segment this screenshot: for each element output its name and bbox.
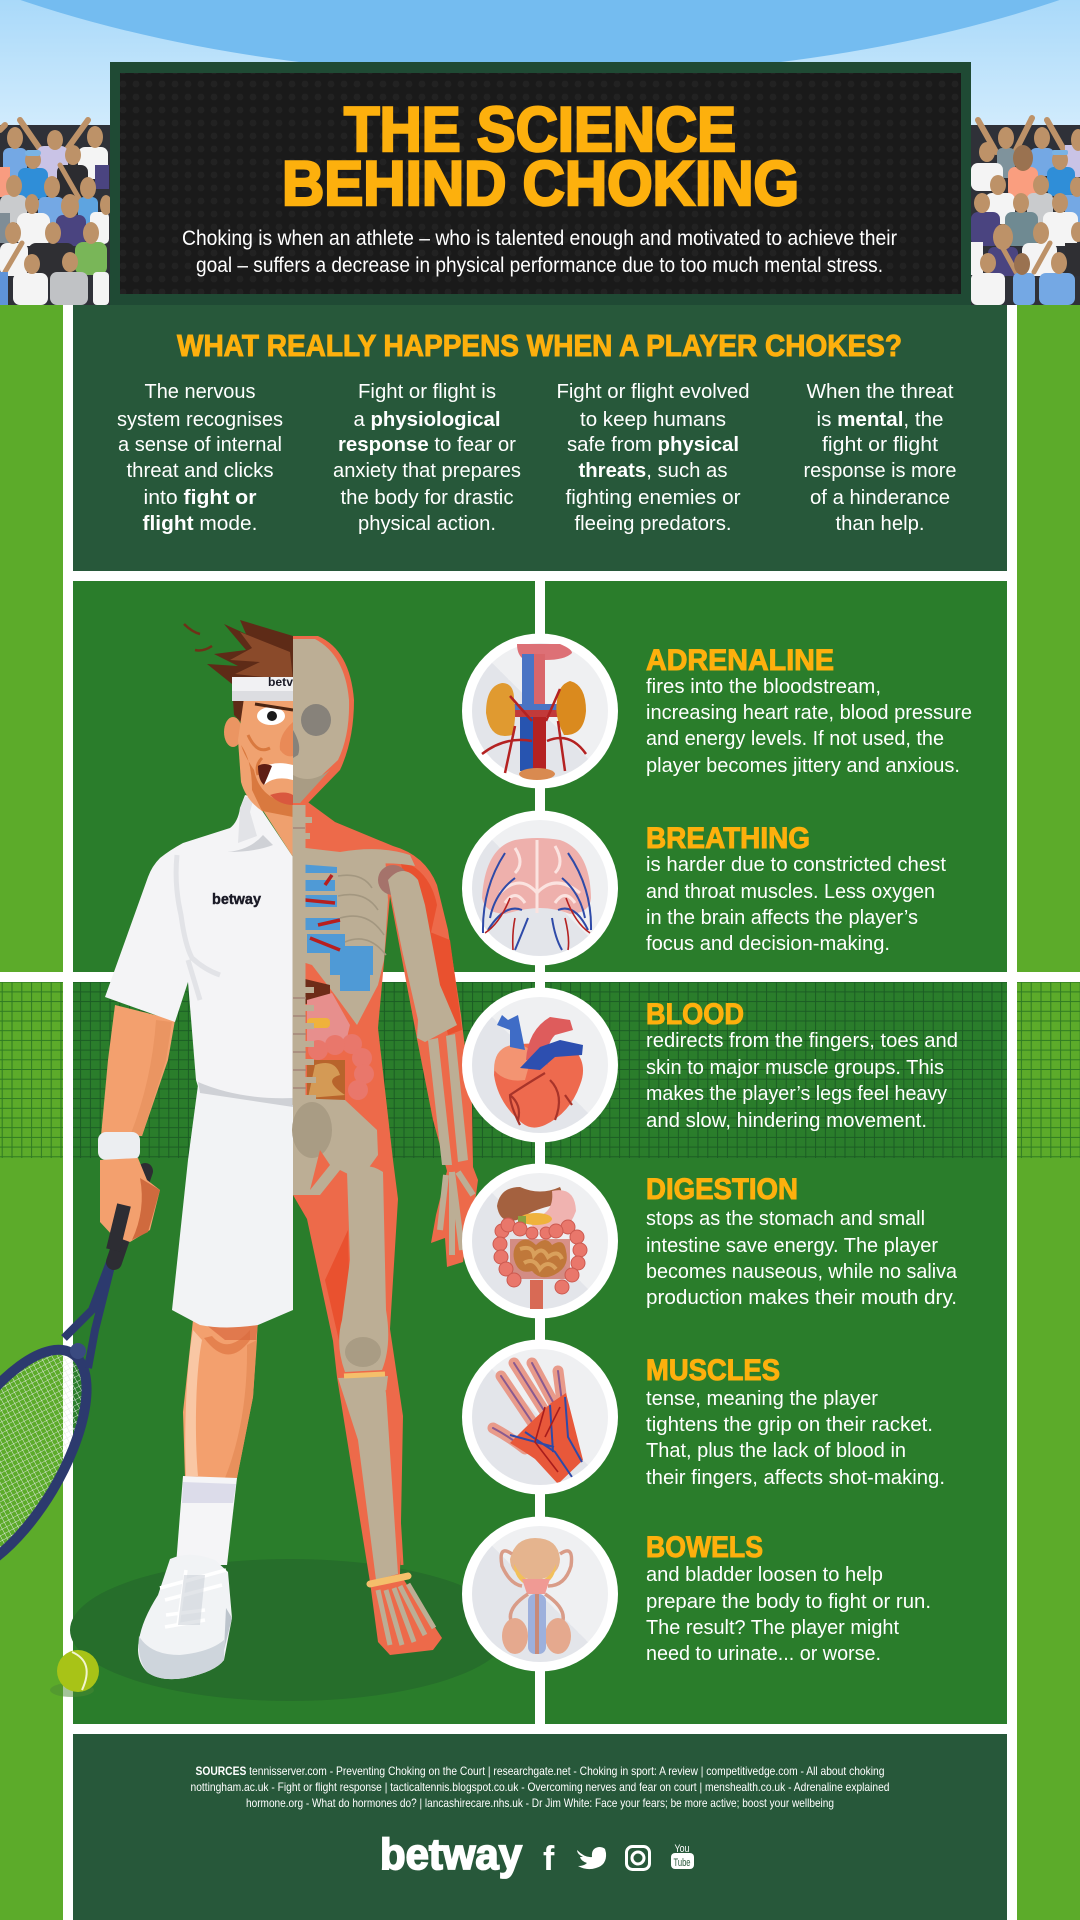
column 2: response to fear or: [338, 434, 516, 456]
crowd right: [971, 118, 1080, 305]
text: muscles: their fingers, affects shot-making.: [646, 1467, 945, 1489]
icon: facebook: f: [543, 1840, 555, 1878]
rib separators: [338, 875, 386, 955]
text: breathing: focus and decision-making.: [646, 933, 890, 955]
panel: footer: [73, 1734, 1007, 1920]
column 1: threat and clicks: [126, 460, 274, 482]
femur: [339, 1166, 388, 1372]
column 4: [804, 381, 956, 535]
column 2: physical action.: [358, 513, 496, 535]
text: breathing: [646, 822, 946, 955]
text: breathing: and throat muscles. Less oxygen: [646, 881, 935, 903]
column 3: fighting enemies or: [566, 487, 741, 509]
icon: heart: [462, 988, 618, 1142]
icon: youtube: Tube: [674, 1857, 690, 1869]
ribcage: [296, 855, 388, 1025]
column 1: [117, 381, 283, 535]
intro text: Choking is when an athlete – who is talented enough and motivated to achieve their: [182, 227, 897, 250]
text: adrenaline: and energy levels. If not used, the: [646, 728, 944, 750]
column 2: [333, 381, 521, 535]
sources: nottingham.ac.uk - Fight or flight response | tacticaltennis.blogspot.co.uk - Overcoming nerves and fear on court | menshealth.co.uk - Adrenaline explained: [190, 1780, 890, 1794]
icon: hand muscles: [462, 1340, 618, 1494]
spine: [293, 805, 316, 1105]
player: human left half: [98, 620, 293, 1679]
text: muscles: [646, 1354, 945, 1489]
text: muscles: tightens the grip on their racket.: [646, 1414, 933, 1436]
text: digestion: becomes nauseous, while no saliva: [646, 1261, 958, 1283]
column 4: fight or flight: [822, 434, 938, 456]
column 3: fleeing predators.: [574, 513, 732, 535]
column 3: to keep humans: [580, 409, 726, 431]
column 3: Fight or flight evolved: [556, 381, 750, 403]
foot bones: [378, 1584, 434, 1645]
hair: [207, 620, 293, 722]
icon: youtube: You: [674, 1843, 690, 1855]
column 3: safe from physical: [567, 434, 739, 456]
column 1: into fight or: [144, 487, 257, 509]
text: digestion: stops as the stomach and small: [646, 1208, 925, 1230]
pelvis: [293, 1098, 378, 1195]
sources: [190, 1764, 890, 1810]
shoe: [138, 1555, 232, 1679]
column 4: response is more: [804, 460, 956, 482]
icon: digestive system: [462, 1164, 618, 1318]
text: blood: makes the player’s legs feel heavy: [646, 1083, 947, 1105]
icon: bowels and bladder: [462, 1516, 618, 1672]
text: breathing: in the brain affects the player’s: [646, 907, 918, 929]
panel: what really happens: [73, 305, 1007, 571]
text: bowels: and bladder loosen to help: [646, 1564, 883, 1586]
left arm: [101, 1005, 175, 1136]
crowd left: [0, 120, 112, 305]
text: adrenaline: ADRENALINE: [646, 644, 834, 677]
column 4: is mental, the: [816, 409, 944, 431]
text: digestion: production makes their mouth dry.: [646, 1287, 957, 1309]
figure shadow: [70, 1559, 510, 1701]
skull: [293, 636, 354, 806]
icon: adrenal glands and kidneys: [462, 634, 618, 788]
sources: hormone.org - What do hormones do? | lancashirecare.nhs.uk - Dr Jim White: Face your fears; be more active; boost your wellbeing: [246, 1796, 834, 1810]
column 2: a physiological: [354, 409, 500, 431]
text: adrenaline: [646, 644, 972, 777]
column 4: When the threat: [806, 381, 954, 403]
sources: SOURCES tennisserver.com - Preventing Choking on the Court | researchgate.net - Choking in sport: A review | competitivedge.com - All about choking: [196, 1764, 884, 1778]
intro text: [182, 227, 897, 277]
icon: instagram: [626, 1846, 650, 1870]
internal organs: [305, 979, 374, 1100]
text: adrenaline: increasing heart rate, blood pressure: [646, 702, 972, 724]
muscle body: [293, 800, 478, 1655]
text: blood: and slow, hindering movement.: [646, 1110, 927, 1132]
text: breathing: BREATHING: [646, 822, 810, 855]
text: digestion: DIGESTION: [646, 1173, 798, 1206]
text: digestion: intestine save energy. The player: [646, 1235, 938, 1257]
tennis ball: [50, 1650, 99, 1697]
betway logo: betway: [380, 1830, 522, 1879]
tennis racket: [0, 1171, 145, 1601]
text: blood: [646, 998, 958, 1132]
ankle: [370, 1576, 408, 1584]
headband: [232, 677, 293, 701]
wristband: [98, 1132, 140, 1160]
arm bones: [378, 865, 468, 1165]
column 4: of a hinderance: [810, 487, 950, 509]
sock: [176, 1476, 237, 1565]
column 2: the body for drastic: [340, 487, 514, 509]
racket handle over hand: [113, 1205, 124, 1250]
text: bowels: BOWELS: [646, 1531, 763, 1564]
sky background: [0, 0, 1080, 130]
text: adrenaline: fires into the bloodstream,: [646, 676, 881, 698]
heading: WHAT REALLY HAPPENS WHEN A PLAYER CHOKES?: [177, 328, 902, 363]
column 1: flight mode.: [142, 513, 258, 535]
column 3: [556, 381, 750, 535]
clavicle: [297, 847, 415, 868]
text: adrenaline: player becomes jittery and anxious.: [646, 755, 960, 777]
left leg: [183, 1320, 258, 1478]
text: muscles: tense, meaning the player: [646, 1388, 878, 1410]
text: muscles: That, plus the lack of blood in: [646, 1440, 906, 1462]
column 3: threats, such as: [578, 460, 728, 482]
shirt: [105, 795, 293, 1107]
headband logo: betv: [268, 675, 293, 689]
column 1: a sense of internal: [118, 434, 282, 456]
icon: youtube: [671, 1843, 694, 1869]
column 4: than help.: [836, 513, 924, 535]
text: digestion: [646, 1173, 958, 1309]
column 2: anxiety that prepares: [333, 460, 521, 482]
title: [282, 95, 799, 219]
column 1: system recognises: [117, 409, 283, 431]
eye: [257, 707, 285, 725]
text: bowels: prepare the body to fight or run.: [646, 1591, 931, 1613]
face: [238, 698, 293, 817]
text: blood: redirects from the fingers, toes and: [646, 1030, 958, 1052]
column 1: The nervous: [144, 381, 256, 403]
text: blood: skin to major muscle groups. This: [646, 1057, 944, 1079]
icon: twitter: [577, 1847, 606, 1869]
shorts: [172, 1085, 293, 1328]
column 2: Fight or flight is: [358, 381, 496, 403]
hand: [100, 1158, 160, 1242]
player: anatomy right half: [292, 636, 478, 1655]
intro text: goal – suffers a decrease in physical performance due to too much mental stress.: [196, 254, 883, 277]
nose: [280, 722, 293, 756]
text: blood: BLOOD: [646, 998, 744, 1031]
mouth: [262, 763, 293, 785]
shirt logo: betway: [212, 891, 262, 908]
text: bowels: The result? The player might: [646, 1617, 899, 1639]
title: THE SCIENCE: [344, 95, 736, 165]
title: BEHIND CHOKING: [282, 149, 799, 219]
ear: [224, 717, 242, 747]
neck: [253, 795, 293, 857]
text: muscles: MUSCLES: [646, 1354, 780, 1387]
hand bones: [440, 1172, 473, 1255]
text: bowels: [646, 1531, 931, 1665]
text: breathing: is harder due to constricted chest: [646, 854, 946, 876]
lungs and blood vessels: [303, 864, 373, 991]
icon: brain and lungs: [462, 810, 618, 966]
text: bowels: need to urinate... or worse.: [646, 1643, 881, 1665]
title board: [110, 62, 971, 305]
